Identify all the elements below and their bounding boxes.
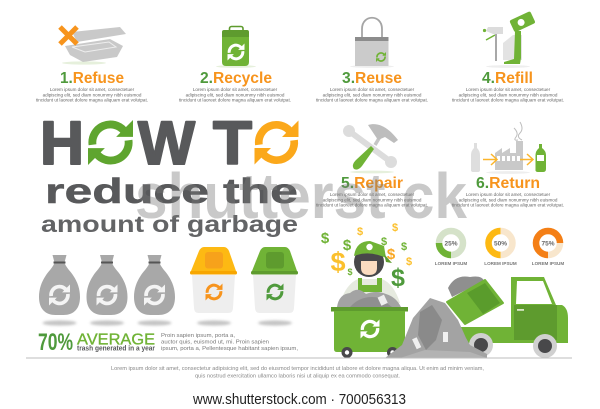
donut: 25%: 25%	[444, 240, 458, 248]
text block	[179, 87, 291, 103]
dollar signs: $	[401, 241, 407, 253]
donut: 75%: LOREM IPSUM	[532, 261, 564, 266]
text block: Lorem ipsum dolor sit amet, consectetuer	[193, 87, 278, 92]
step 5: repair	[316, 124, 428, 208]
donut: 50%: 50%	[494, 240, 507, 248]
watermark: shutterst ck	[135, 160, 467, 232]
text block: tincidunt ut laoreet dolore magna aliquam erat volutpat.	[452, 203, 564, 208]
icon: food box with cross	[60, 27, 126, 65]
text block: adipiscing elit, sed diam nonummy nibh euismod	[323, 92, 422, 97]
text block: description: ipsum, porta a, Pellentesque habitant sapien ipsum,	[161, 346, 298, 352]
text block: Lorem ipsum dolor sit amet, consectetuer	[50, 87, 135, 92]
donut: 50%	[484, 231, 517, 266]
text block: tincidunt ut laoreet dolore magna aliquam erat volutpat.	[36, 98, 148, 103]
person with recycling hat	[340, 241, 400, 303]
text block	[452, 87, 564, 103]
dump truck	[447, 276, 568, 358]
title: amount of garbage: amount of garbage	[41, 211, 298, 237]
dollar signs: $	[330, 247, 346, 277]
step 2: recycle	[179, 26, 291, 103]
text block	[316, 87, 428, 103]
text block: Lorem ipsum dolor sit amet, consectetuer	[330, 87, 415, 92]
step 4: refill	[452, 11, 564, 103]
heading: 3.Reuse	[342, 70, 402, 87]
title: how to: H	[40, 109, 84, 177]
dollar signs: $	[321, 230, 330, 247]
dollar signs: $	[357, 226, 363, 238]
icon: hammer, wrench and screwdriver	[343, 124, 398, 173]
icon: green recycle O	[88, 120, 133, 165]
title: how to	[40, 109, 252, 177]
text block: Lorem ipsum dolor sit amet, consectetuer	[466, 87, 551, 92]
text block: Lorem ipsum dolor sit amet, consectetuer	[466, 192, 551, 197]
statistic: 70% average: 70%	[38, 329, 73, 356]
divider	[26, 358, 572, 359]
donut: 75%	[532, 231, 564, 266]
heading: 6.Return	[476, 175, 540, 192]
garbage bags	[39, 255, 175, 326]
donut: 25%: LOREM IPSUM	[435, 261, 467, 266]
dollar signs: $	[347, 267, 353, 277]
title: how to: T	[213, 109, 252, 177]
icon: green bin	[216, 26, 256, 68]
heading: 1.Refuse	[60, 70, 124, 87]
donut: 50%: LOREM IPSUM	[484, 261, 517, 266]
step 1: refuse	[36, 27, 148, 103]
text block: adipiscing elit, sed diam nonummy nibh euismod	[459, 197, 558, 202]
text block: description	[161, 333, 298, 352]
dollar signs: $	[391, 264, 405, 292]
text block: tincidunt ut laoreet dolore magna aliquam erat volutpat.	[452, 98, 564, 103]
text block: tincidunt ut laoreet dolore magna aliquam erat volutpat.	[179, 98, 291, 103]
title: reduce the: reduce the	[45, 172, 298, 211]
green bin	[251, 247, 298, 326]
yellow bin	[190, 247, 237, 326]
text block: adipiscing elit, sed diam nonummy nibh euismod	[43, 92, 142, 97]
statistic: 70% average	[38, 329, 155, 356]
icon: shopping bag	[350, 18, 394, 68]
title	[40, 109, 298, 237]
step 6: return	[452, 122, 564, 208]
step 3: reuse	[316, 18, 428, 103]
dollar signs: $	[406, 256, 412, 268]
dollar signs: $	[381, 236, 387, 248]
wheelie bin with garbage	[331, 290, 408, 358]
text block: tincidunt ut laoreet dolore magna aliquam erat volutpat.	[316, 203, 428, 208]
donut: 25%	[435, 231, 467, 266]
text block: description: Proin sapien ipsum, porta a,	[161, 333, 235, 339]
text block	[452, 192, 564, 208]
icon: orange recycle O	[254, 120, 298, 164]
heading: 4.Refill	[482, 70, 533, 87]
donut: 75%: 75%	[541, 240, 555, 248]
text block: adipiscing elit, sed diam nonummy nibh euismod	[186, 92, 285, 97]
icon: bottle, factory and recycled bottle	[471, 122, 546, 174]
footer text: Lorem ipsum dolor sit amet, consectetur adipisicing elit, sed do eiusmod tempor incididunt ut labore et dolore magna aliqua. Ut enim ad minim veniam,	[111, 366, 485, 372]
footer text	[111, 366, 485, 380]
title: how to: W	[138, 109, 195, 177]
text block	[36, 87, 148, 103]
text block	[316, 192, 428, 208]
text block: adipiscing elit, sed diam nonummy nibh euismod	[459, 92, 558, 97]
heading: 2.Recycle	[200, 70, 272, 87]
statistic: 70% average: trash generated in a year	[77, 346, 155, 352]
footer text: quis nostrud exercitation ullamco laboris nisi ut aliquip ex ea commodo consequat.	[195, 374, 400, 380]
heading: 5.Repair	[341, 175, 403, 192]
text block: adipiscing elit, sed diam nonummy nibh euismod	[323, 197, 422, 202]
text block: Lorem ipsum dolor sit amet, consectetuer	[330, 192, 415, 197]
dollar signs	[321, 222, 412, 292]
dollar signs: $	[343, 237, 352, 254]
dollar signs: $	[387, 246, 396, 263]
text block: tincidunt ut laoreet dolore magna aliquam erat volutpat.	[316, 98, 428, 103]
dollar signs: $	[392, 222, 398, 234]
source url: www.shutterstock.com · 700056313	[192, 392, 406, 408]
icon: spray bottle and refill pouch	[483, 11, 536, 68]
statistic: 70% average: AVERAGE	[77, 332, 155, 348]
text block: description: auctor quis, euismod ut, mi. Proin sapien	[161, 340, 269, 346]
garbage pile	[385, 298, 487, 358]
